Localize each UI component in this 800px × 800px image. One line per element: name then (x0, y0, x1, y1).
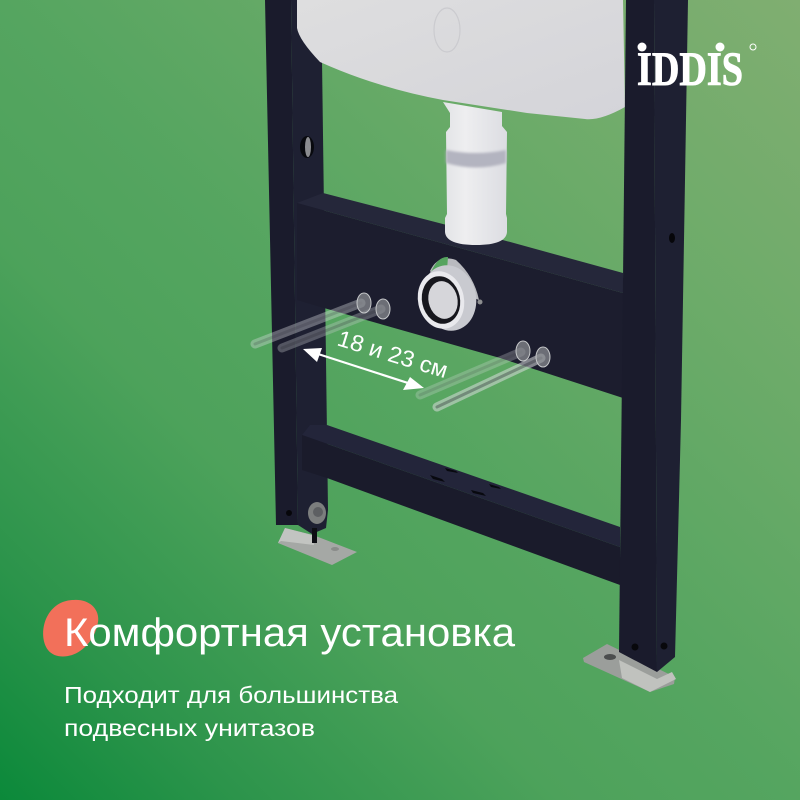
hole: lower (286, 510, 292, 516)
accent blob (43, 600, 98, 656)
subtitle text: Подходит для большинства (64, 682, 398, 708)
cistern tank (297, 0, 625, 119)
studs: right pair (420, 341, 550, 407)
cistern embossed logo (434, 8, 460, 52)
screw (478, 300, 482, 304)
frame: left post (265, 0, 328, 543)
hole: bottom right (660, 642, 668, 650)
dimension label: 18 и 23 см (335, 325, 451, 383)
title: Комфортная установка (64, 611, 516, 655)
hole: bottom left (632, 644, 638, 650)
leveling screw (312, 528, 317, 543)
hole: upper (669, 233, 675, 243)
subtitle text: подвесных унитазов (64, 715, 315, 741)
foot: right mounting plate (583, 644, 676, 692)
frame: lower crossbar (302, 425, 620, 585)
brand logo: IDDIS (637, 43, 743, 96)
foot: left mounting plate (278, 528, 357, 565)
dimension arrow (303, 348, 424, 390)
outlet ring (412, 257, 482, 336)
studs: left pair (255, 293, 390, 348)
subtitle text (64, 682, 398, 741)
frame: upper crossbar (297, 193, 623, 398)
hole: upper slot (300, 136, 314, 158)
drain pipe (443, 102, 507, 245)
mounting slots (430, 468, 501, 496)
adjustment bolt (308, 502, 326, 524)
frame: right post (619, 0, 688, 672)
